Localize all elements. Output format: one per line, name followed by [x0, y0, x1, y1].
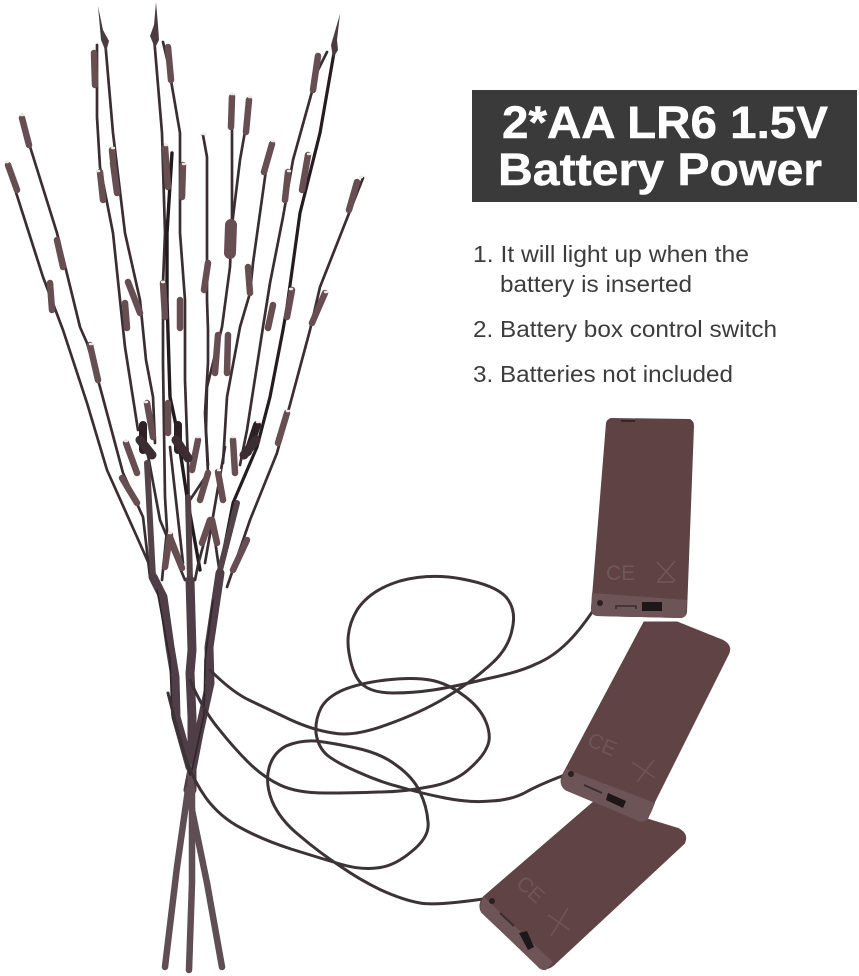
- heading banner: [472, 90, 857, 202]
- item 1: 1. It will light up when the: [473, 241, 749, 267]
- stem tails: [165, 767, 222, 970]
- box 2 switch: [606, 793, 626, 808]
- box 1 recycling mark: [657, 561, 675, 582]
- pointed branch tips: [98, 2, 340, 58]
- box 1 CE mark: CE: [606, 562, 635, 585]
- box 2 wire port: [568, 771, 574, 777]
- box 1 top notch: [621, 420, 635, 422]
- battery box 3: [480, 803, 685, 970]
- item 3: 3. Batteries not included: [473, 361, 733, 387]
- box 3 recycling mark: [548, 908, 570, 936]
- box 2 switch slot: [584, 785, 602, 793]
- box 2 CE mark: CE: [584, 729, 620, 761]
- wires: [168, 576, 598, 904]
- bud sleeves: [8, 47, 357, 570]
- wire: box 3: [168, 693, 490, 904]
- box 3 end face: [480, 897, 553, 970]
- box 3 CE mark: CE: [512, 872, 549, 908]
- item 2: 2. Battery box control switch: [473, 316, 777, 342]
- box 3 wire port: [489, 898, 495, 904]
- stem highlight: [157, 590, 213, 775]
- thin branches: [7, 37, 363, 587]
- battery box 1: [591, 418, 694, 618]
- LED tips: [6, 94, 362, 533]
- wire: box 1: [210, 576, 598, 734]
- wire: box 2: [190, 678, 570, 802]
- upper stem sections: [147, 463, 237, 580]
- feature list: [473, 241, 777, 387]
- item 1: battery is inserted: [500, 271, 692, 297]
- illustration: lighted branch bundle: [6, 2, 363, 970]
- box 3 switch: [519, 931, 534, 950]
- box 1 switch: [642, 602, 662, 611]
- box 2 recycling mark: [632, 760, 655, 782]
- box 1 switch slot: [616, 606, 636, 609]
- heading line 2: Battery Power: [498, 144, 822, 195]
- box 3 switch slot: [500, 913, 514, 926]
- box 2 end face: [561, 769, 655, 822]
- three stems: [153, 573, 220, 790]
- item 1: [473, 241, 749, 297]
- box 1 end face: [591, 593, 687, 618]
- heading line 1: 2*AA LR6 1.5V: [502, 97, 828, 148]
- battery box 2: [561, 622, 730, 822]
- box 1 wire port: [597, 600, 603, 606]
